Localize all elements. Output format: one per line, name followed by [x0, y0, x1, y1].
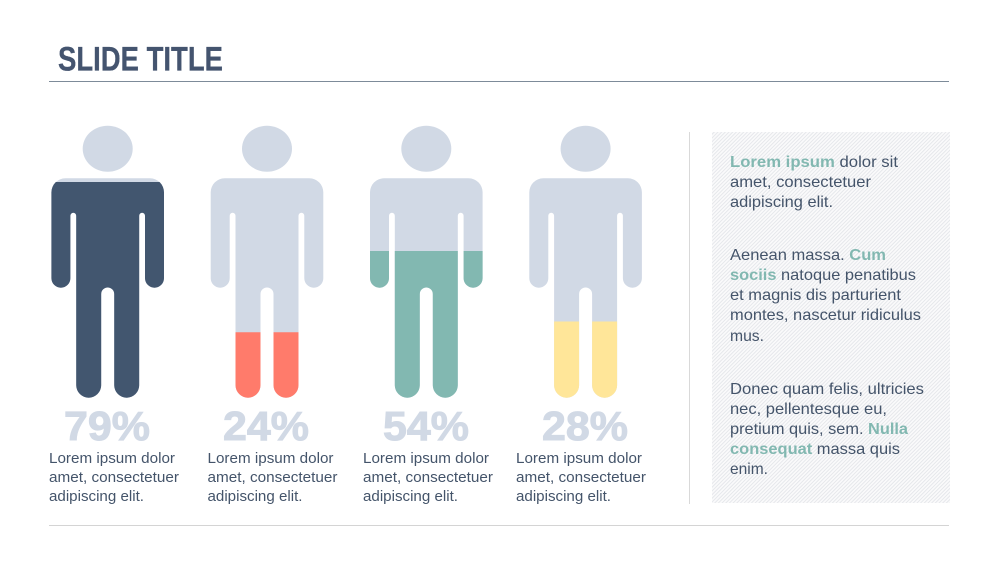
text block: paragraph 3: pretium quis, sem. Nulla: [730, 421, 908, 438]
icon: head: [83, 126, 133, 172]
caption 2: Lorem ipsum dolor: [208, 451, 334, 467]
text block: paragraph 3: enim.: [730, 461, 768, 478]
icon: body base: [529, 178, 642, 398]
text block: paragraph 3: Donec quam felis, ultricies: [730, 381, 924, 398]
text block: paragraph 2: Aenean massa. Cum: [730, 247, 886, 264]
figure: 28 percent: [529, 126, 642, 398]
caption 4: adipiscing elit.: [516, 489, 611, 505]
caption 3: Lorem ipsum dolor: [363, 451, 489, 467]
text block: paragraph 1: Lorem ipsum dolor sit: [730, 154, 899, 171]
stat: 54%: 54%: [383, 403, 469, 449]
stat: 28%: 28%: [542, 403, 628, 449]
icon: body fill 28 percent: [554, 322, 618, 398]
caption 2: adipiscing elit.: [208, 489, 302, 505]
caption 3: adipiscing elit.: [363, 489, 458, 505]
icon: head: [561, 126, 611, 172]
icon: head: [242, 126, 292, 172]
caption 4: amet, consectetuer: [516, 470, 646, 486]
icon: head: [401, 126, 451, 172]
figure: 79 percent: [51, 126, 164, 398]
figure: 24 percent: [211, 126, 323, 398]
icon: body base: [370, 178, 483, 398]
panel: hatched sidebar: [712, 132, 950, 503]
text block: paragraph 1: adipiscing elit.: [730, 194, 833, 211]
icon: body base: [211, 178, 323, 398]
caption 2: amet, consectetuer: [208, 470, 338, 486]
caption 1: amet, consectetuer: [49, 470, 179, 486]
text block: paragraph 3: consequat massa quis: [730, 441, 900, 458]
icon: body fill 79 percent: [51, 178, 164, 398]
title: SLIDE TITLE: [58, 40, 223, 78]
icon: body base: [51, 178, 164, 398]
text block: paragraph 3: [730, 381, 924, 478]
caption 4: Lorem ipsum dolor: [516, 451, 642, 467]
stat: 24%: 24%: [223, 403, 309, 449]
caption 1: Lorem ipsum dolor: [49, 451, 175, 467]
text block: paragraph 1: amet, consectetuer: [730, 174, 871, 191]
caption 2: [208, 451, 338, 505]
caption 3: [363, 451, 493, 505]
text block: paragraph 2: [730, 247, 921, 345]
text block: paragraph 1: [730, 154, 899, 211]
text block: paragraph 2: et magnis dis parturient: [730, 287, 902, 304]
icon: body fill 54 percent: [370, 251, 483, 398]
text block: paragraph 2: sociis natoque penatibus: [730, 267, 916, 284]
caption 1: [49, 451, 179, 505]
text block: paragraph 3: nec, pellentesque eu,: [730, 401, 887, 418]
caption 3: amet, consectetuer: [363, 470, 493, 486]
icon: body fill 24 percent: [236, 332, 298, 398]
caption 4: [516, 451, 646, 505]
text block: paragraph 2: mus.: [730, 328, 764, 345]
figure: 54 percent: [370, 126, 483, 398]
caption 1: adipiscing elit.: [49, 489, 144, 505]
stat: 79%: 79%: [64, 403, 150, 449]
text block: paragraph 2: montes, nascetur ridiculus: [730, 307, 921, 324]
